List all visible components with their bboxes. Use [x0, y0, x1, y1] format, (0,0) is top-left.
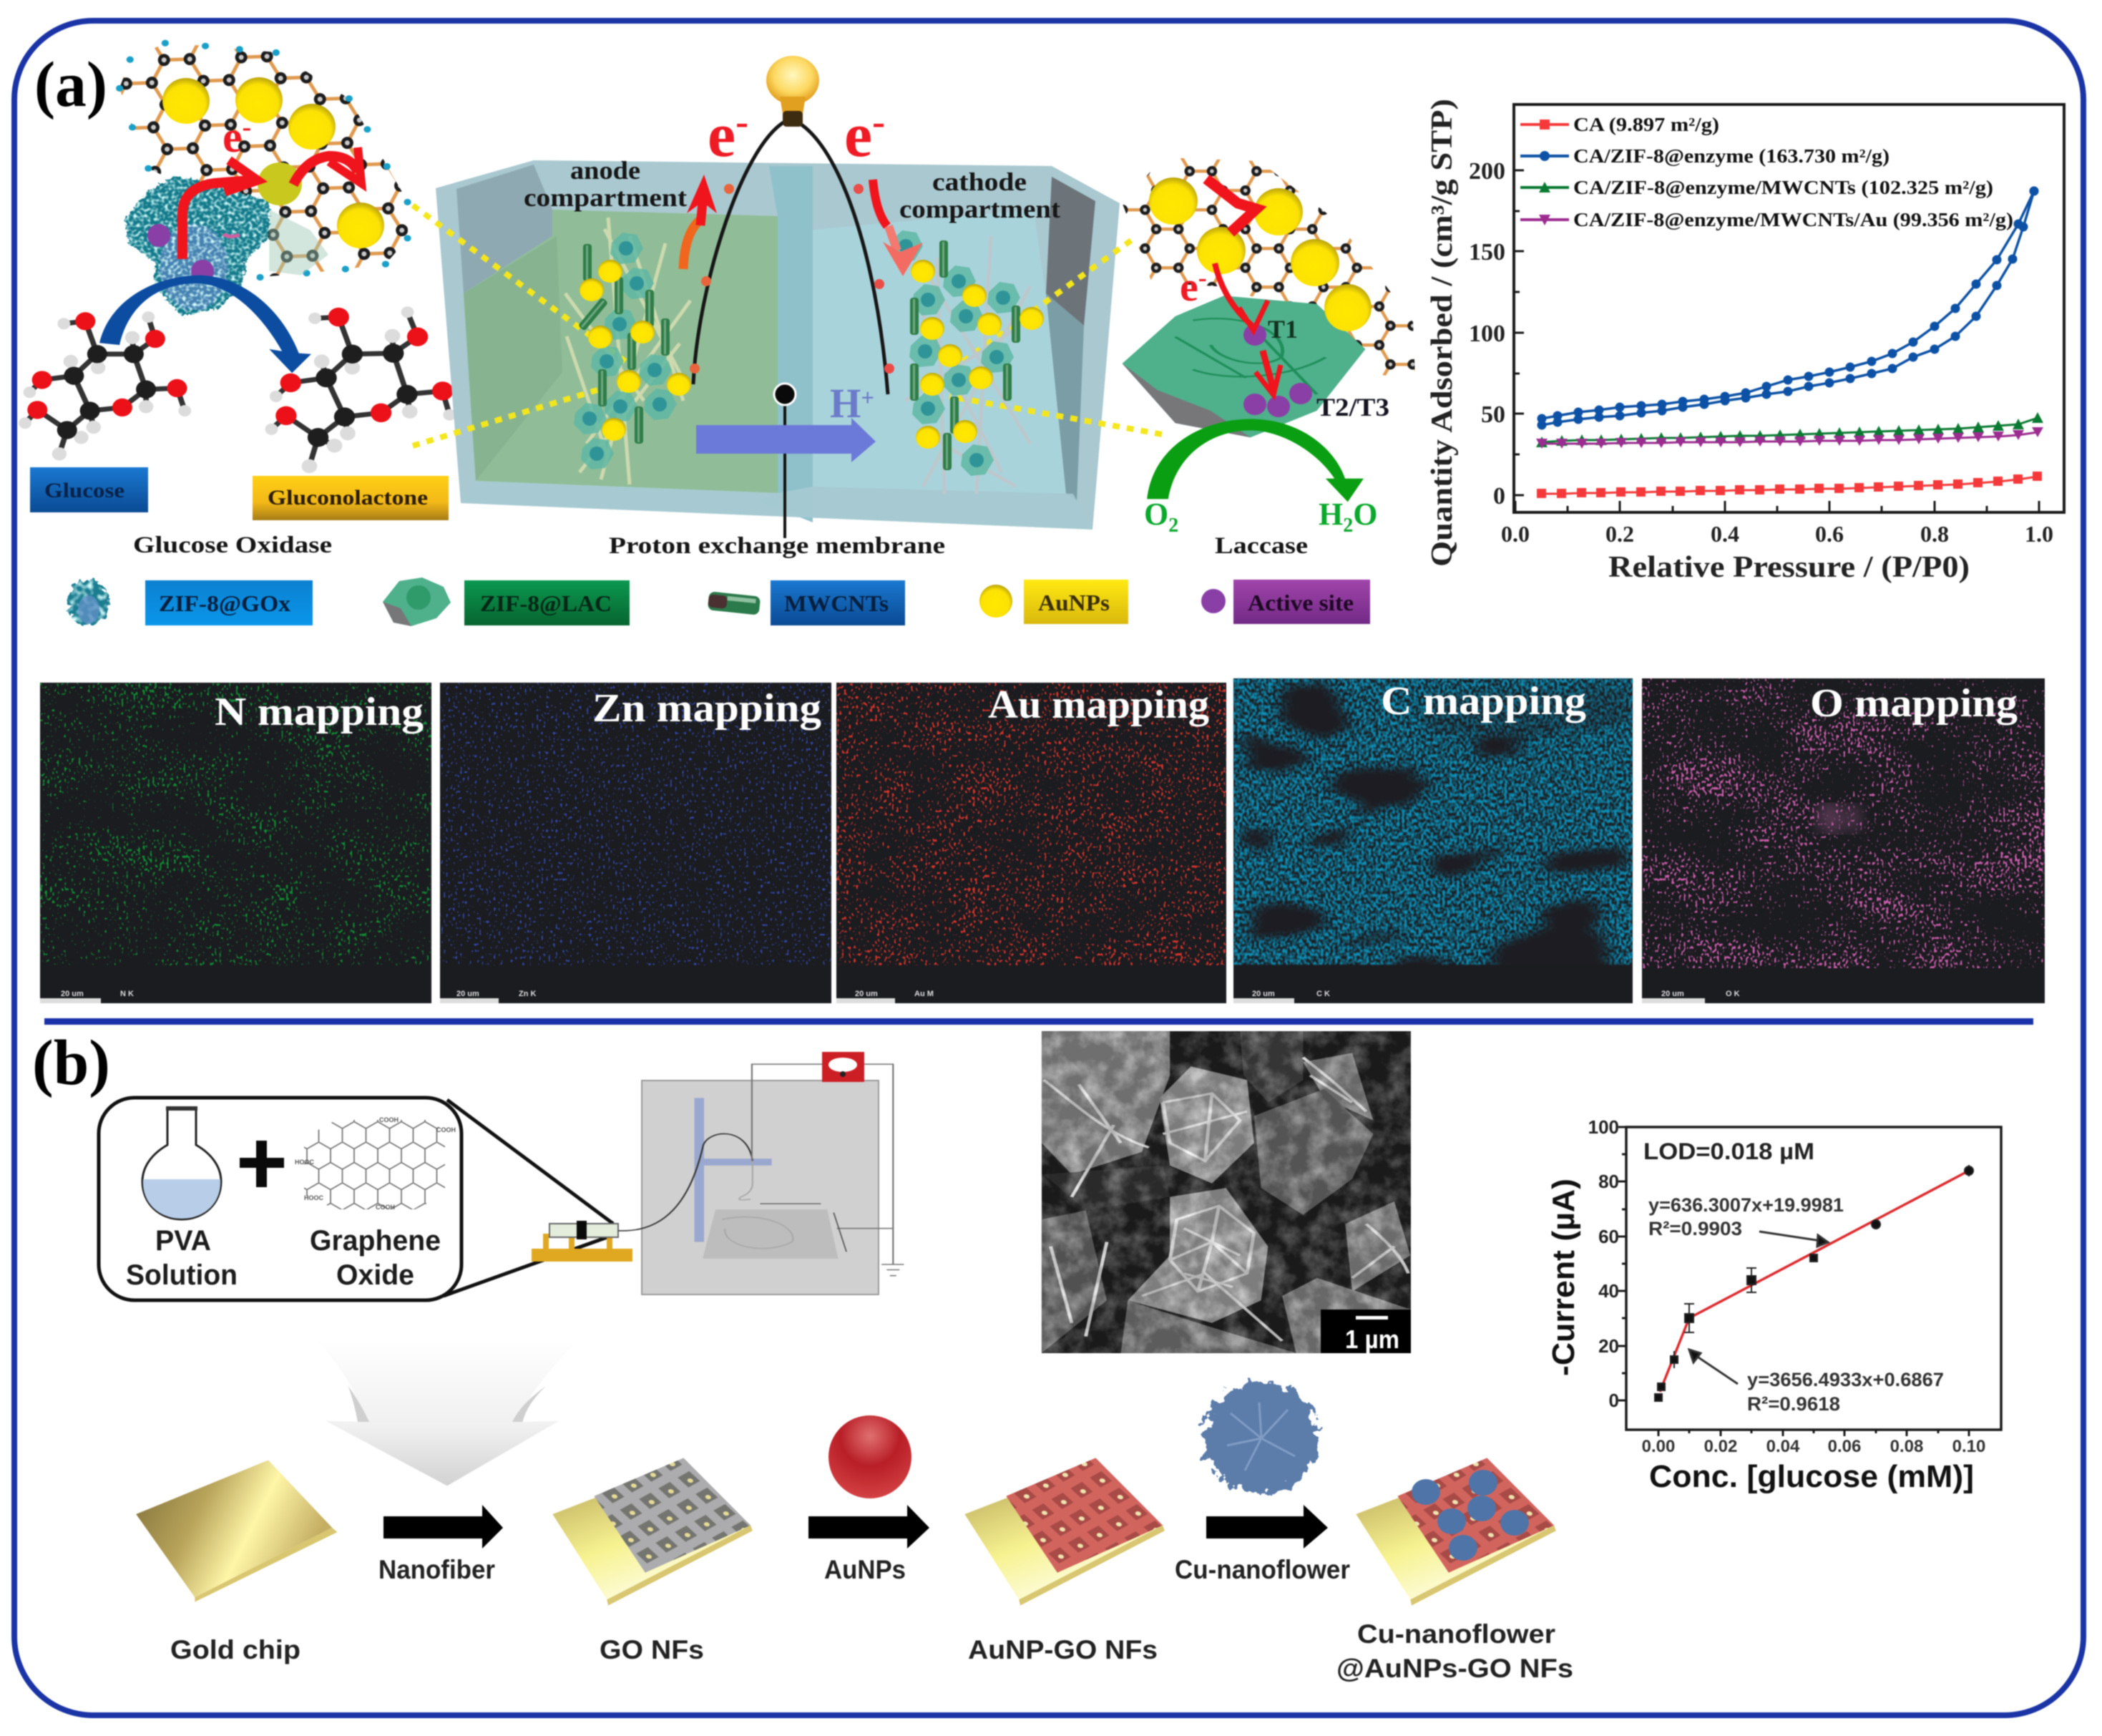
map: N: N K: [120, 990, 134, 998]
y-axis tick labels: [1588, 1116, 1619, 1411]
label: Graphene Oxide: Graphene: [310, 1225, 441, 1257]
icon: flask with PVA solution: [142, 1106, 221, 1219]
icon: ZIF-8@GOx: [68, 580, 109, 625]
map: C: C K: [1316, 990, 1330, 998]
label: Graphene Oxide: [310, 1225, 441, 1291]
label: anode compartment: anode: [570, 156, 640, 185]
arrow: cathode electron arrow: [873, 180, 923, 276]
step labels: Cu-nanoflower: [1357, 1619, 1555, 1649]
arrow: nanofiber step: [383, 1505, 503, 1549]
series: CA/ZIF-8@enzyme desorption: [1542, 191, 2034, 419]
key: Active site: [1233, 580, 1370, 624]
annotation: upper fit equation: [1648, 1194, 1844, 1239]
key: MWCNTs: MWCNTs: [784, 590, 889, 616]
label: Proton exchange membrane: Proton exchange membrane: [609, 533, 945, 559]
label: Gluconolactone: Gluconolactone: [268, 486, 428, 509]
x-axis tick labels: 0.08: [1890, 1437, 1923, 1456]
x-axis tick labels: 0.4: [1711, 521, 1739, 547]
chart legend: CA/ZIF-8@enzyme/MWCNTs (102.325 m²/g): [1573, 177, 1993, 198]
key: ZIF-8@LAC: ZIF-8@LAC: [480, 590, 612, 616]
x-axis title: Relative Pressure / (P/P0): [1608, 551, 1970, 584]
map: Zn: Zn mapping: [592, 686, 821, 731]
x-axis tick labels: 1.0: [2025, 521, 2053, 547]
y-axis tick labels: 100: [1469, 321, 1505, 347]
icon: red gold nanoparticle: [828, 1415, 911, 1498]
step labels: AuNP-GO NFs: [968, 1635, 1158, 1664]
map: Zn: [440, 683, 831, 1003]
label: cathode compartment: compartment: [899, 195, 1060, 223]
icon: ZIF-8@LAC: [383, 577, 451, 626]
map: Au: Au M: [914, 990, 934, 998]
label: H2O: H: [1319, 497, 1343, 532]
callout: zoom lines from inset to syringe: [444, 1100, 613, 1296]
label: electron, anode side: -: [243, 112, 251, 142]
x-axis tick labels: 0.04: [1766, 1437, 1800, 1456]
label: anode compartment: compartment: [524, 183, 687, 212]
arrow: proton transport: [696, 418, 876, 462]
panel: (a) enzymatic biofuel cell: [19, 36, 2064, 626]
y-axis tick labels: 0: [1609, 1390, 1619, 1411]
image: SEM micrograph: [1042, 1031, 1411, 1354]
label: Graphene Oxide: Oxide: [336, 1259, 414, 1291]
key: MWCNTs: [771, 580, 905, 625]
label: T1 site: T1: [1268, 315, 1298, 343]
map: C: C mapping: [1381, 679, 1586, 723]
icon: AuNP-GO NFs chip: [964, 1458, 1165, 1606]
annotation: lower fit equation: R²=0.9618: [1747, 1393, 1840, 1415]
map: N: 20 um: [61, 990, 84, 998]
label: O2: O: [1144, 497, 1168, 532]
diagram: fuel cell compartments: [436, 160, 1120, 530]
scale bar box: [1321, 1310, 1411, 1354]
x-axis tick labels: 0.00: [1642, 1437, 1675, 1456]
icon: anode graphene sheet with gold nanoparticles and glucose oxidase: [114, 36, 415, 316]
label: electron cathode side: -: [1198, 263, 1207, 292]
panel label (b): (b): [32, 1028, 110, 1098]
label: electron left: -: [735, 100, 748, 143]
icon: cathode graphene sheet with laccase: [1116, 154, 1417, 437]
label: H+: H: [830, 380, 862, 426]
icon: graphene oxide structure: [295, 1116, 456, 1213]
legend: material keys: [68, 577, 1370, 626]
icon: meter: [822, 1052, 864, 1082]
x-axis tick labels: 0.6: [1815, 521, 1844, 547]
map: Au: [836, 683, 1226, 1003]
label: H+: +: [861, 385, 874, 411]
annotation: limit of detection: LOD=0.018 µM: [1643, 1138, 1814, 1164]
x-axis tick labels: [1501, 521, 2053, 547]
annotation arrows: [1689, 1232, 1828, 1384]
label: H2O: 2: [1343, 515, 1353, 537]
key: ZIF-8@GOx: ZIF-8@GOx: [159, 590, 290, 616]
inset: PVA and graphene oxide mix: [99, 1098, 461, 1300]
label: PVA Solution: PVA: [155, 1225, 211, 1257]
key: AuNPs: [1024, 580, 1128, 624]
y-axis tick labels: 20: [1598, 1335, 1619, 1357]
map: C: 20 um: [1252, 990, 1275, 998]
x-axis tick labels: 0.06: [1828, 1437, 1861, 1456]
icon: wire circuit with contact dots: [690, 119, 894, 394]
map: Zn: Zn K: [519, 990, 536, 998]
key: ZIF-8@LAC: [464, 580, 630, 625]
icon: GO NFs chip: [552, 1458, 753, 1606]
map: O: O K: [1726, 990, 1740, 998]
chart legend: [1520, 114, 2013, 230]
series: CA: [1542, 477, 2038, 494]
icon: syringe pump: [532, 1221, 632, 1262]
chart: nitrogen adsorption isotherms: [1426, 99, 2064, 584]
y-axis tick labels: 50: [1481, 401, 1505, 428]
annotation: upper fit equation: y=636.3007x+19.9981: [1648, 1194, 1844, 1216]
arrow: blue glucose to gluconolactone arc: [99, 275, 311, 373]
map: C: [1233, 678, 1633, 1003]
arrow: anode electron arrow: [683, 175, 717, 269]
label: electron right: -: [872, 100, 885, 143]
annotation: upper fit equation: R²=0.9903: [1648, 1218, 1742, 1239]
y-axis title: Quantity Adsorbed / (cm³/g STP): [1426, 99, 1459, 567]
fit lines: [1660, 1171, 1969, 1392]
label: Gluconolactone: [253, 476, 449, 520]
annotation: lower fit equation: [1747, 1369, 1944, 1415]
step labels: AuNPs: [824, 1555, 906, 1584]
label: Laccase: Laccase: [1215, 533, 1308, 559]
y-axis title: -Current (µA): [1546, 1179, 1581, 1376]
label: electron right: e: [844, 101, 872, 170]
map: O: O mapping: [1810, 681, 2018, 726]
arrow: Cu-nanoflower step: [1206, 1505, 1328, 1549]
y-axis tick labels: 40: [1598, 1280, 1619, 1302]
map: N: [40, 683, 431, 1003]
map: O: [1642, 678, 2045, 1003]
icon: graphene oxide structure: COOH: [436, 1126, 456, 1133]
series: CA/ZIF-8@enzyme/MWCNTs/Au: [1542, 432, 2038, 444]
x-axis tick labels: 0.02: [1704, 1437, 1737, 1456]
icon: gold chip: [136, 1461, 337, 1602]
x-axis tick labels: 0.2: [1605, 521, 1634, 547]
y-axis tick labels: 150: [1469, 239, 1505, 265]
panel label (a): (a): [34, 49, 107, 120]
x-axis tick labels: 0.0: [1501, 521, 1530, 547]
label: electron, anode side: e: [223, 113, 243, 162]
x-axis tick labels: 0.8: [1920, 521, 1949, 547]
icon: AuNPs: [979, 585, 1012, 618]
icon: light bulb: [766, 56, 819, 127]
arrow: red electron path to T1 and T2/T3: [1206, 179, 1281, 395]
panel: (b) glucose sensor fabrication: [32, 1028, 2001, 1683]
chart legend: CA (9.897 m²/g): [1573, 114, 1719, 135]
key: AuNPs: AuNPs: [1038, 590, 1110, 615]
icon: graphene oxide structure: COOH: [376, 1204, 395, 1211]
step labels: GO NFs: [600, 1635, 704, 1664]
map: N: N mapping: [215, 690, 424, 734]
arrow: green O2 to H2O arc: [1147, 419, 1364, 502]
label: T2/T3 sites: T2/T3: [1316, 393, 1389, 421]
label: O2: 2: [1168, 515, 1178, 537]
step labels: [170, 1555, 1573, 1683]
x-axis tick labels: 0.10: [1952, 1437, 1985, 1456]
icon: gluconolactone molecule: [265, 306, 456, 473]
decoration: yellow dotted guide lines: [413, 205, 1162, 446]
label: cathode compartment: cathode: [932, 167, 1027, 196]
callout: proton exchange membrane pointer: [774, 384, 796, 538]
icon: cathode nanostructure: [890, 230, 1044, 494]
annotation: lower fit equation: y=3656.4933x+0.6867: [1747, 1369, 1944, 1390]
icon: copper nanoflower: [1204, 1382, 1319, 1493]
label: Glucose: [30, 467, 148, 512]
step labels: Nanofiber: [378, 1555, 495, 1584]
y-axis tick labels: 60: [1598, 1226, 1619, 1247]
y-axis tick labels: 0: [1493, 483, 1505, 509]
arrow: red electron path: [182, 147, 361, 259]
label: cathode compartment: [899, 167, 1060, 223]
chart legend: CA/ZIF-8@enzyme/MWCNTs/Au (99.356 m²/g): [1573, 209, 2013, 230]
icon: graphene oxide structure: COOH: [379, 1116, 399, 1123]
map: Au: 20 um: [855, 990, 878, 998]
icon: active site: [1201, 589, 1226, 613]
icon: glucose molecule: [19, 311, 191, 460]
scale bar box: 1 µm: [1345, 1325, 1399, 1354]
x-axis title: Conc. [glucose (mM)]: [1649, 1459, 1974, 1494]
icon: anode nanostructure: [565, 218, 691, 484]
y-axis tick labels: [1469, 158, 1505, 509]
step labels: @AuNPs-GO NFs: [1336, 1654, 1573, 1683]
label: Glucose: Glucose: [44, 479, 124, 502]
arrow: AuNPs step: [808, 1505, 929, 1549]
y-axis tick labels: 200: [1469, 158, 1505, 185]
label: H2O: O: [1353, 497, 1377, 532]
chart legend: CA/ZIF-8@enzyme (163.730 m²/g): [1573, 145, 1890, 167]
series: CA/ZIF-8@enzyme/MWCNTs: [1542, 418, 2038, 442]
map: Zn: 20 um: [456, 990, 479, 998]
icon: electrospinning setup: [532, 1052, 904, 1294]
data points with error bars: [1655, 1165, 1973, 1401]
panel: elemental mapping images: [40, 678, 2045, 1003]
label: PVA Solution: Solution: [126, 1259, 238, 1291]
series: CA/ZIF-8@enzyme adsorption: [1542, 191, 2034, 425]
icon: plus sign: [240, 1141, 284, 1187]
label: electron cathode side: e: [1180, 263, 1198, 310]
map: Au: Au mapping: [988, 683, 1209, 727]
map: O: 20 um: [1661, 990, 1684, 998]
chart: calibration curve: [1546, 1116, 2001, 1494]
y-axis tick labels: 80: [1598, 1171, 1619, 1192]
icon: graphene oxide structure: HOOC: [295, 1159, 315, 1166]
key: ZIF-8@GOx: [145, 580, 313, 625]
key: Active site: Active site: [1248, 590, 1354, 615]
label: electron left: e: [708, 101, 735, 170]
label: PVA Solution: [126, 1225, 238, 1291]
step labels: Gold chip: [170, 1635, 300, 1664]
icon: Cu-nanoflower chip: [1356, 1458, 1556, 1606]
arrow: large grey down arrow: [313, 1337, 582, 1486]
icon: MWCNTs: [708, 591, 761, 615]
step labels: Cu-nanoflower: [1175, 1555, 1350, 1584]
icon: graphene oxide structure: HOOC: [304, 1194, 324, 1201]
label: Glucose Oxidase: Glucose Oxidase: [133, 532, 332, 558]
x-axis tick labels: [1642, 1437, 1985, 1456]
label: anode compartment: [524, 156, 687, 212]
y-axis tick labels: 100: [1588, 1116, 1619, 1138]
